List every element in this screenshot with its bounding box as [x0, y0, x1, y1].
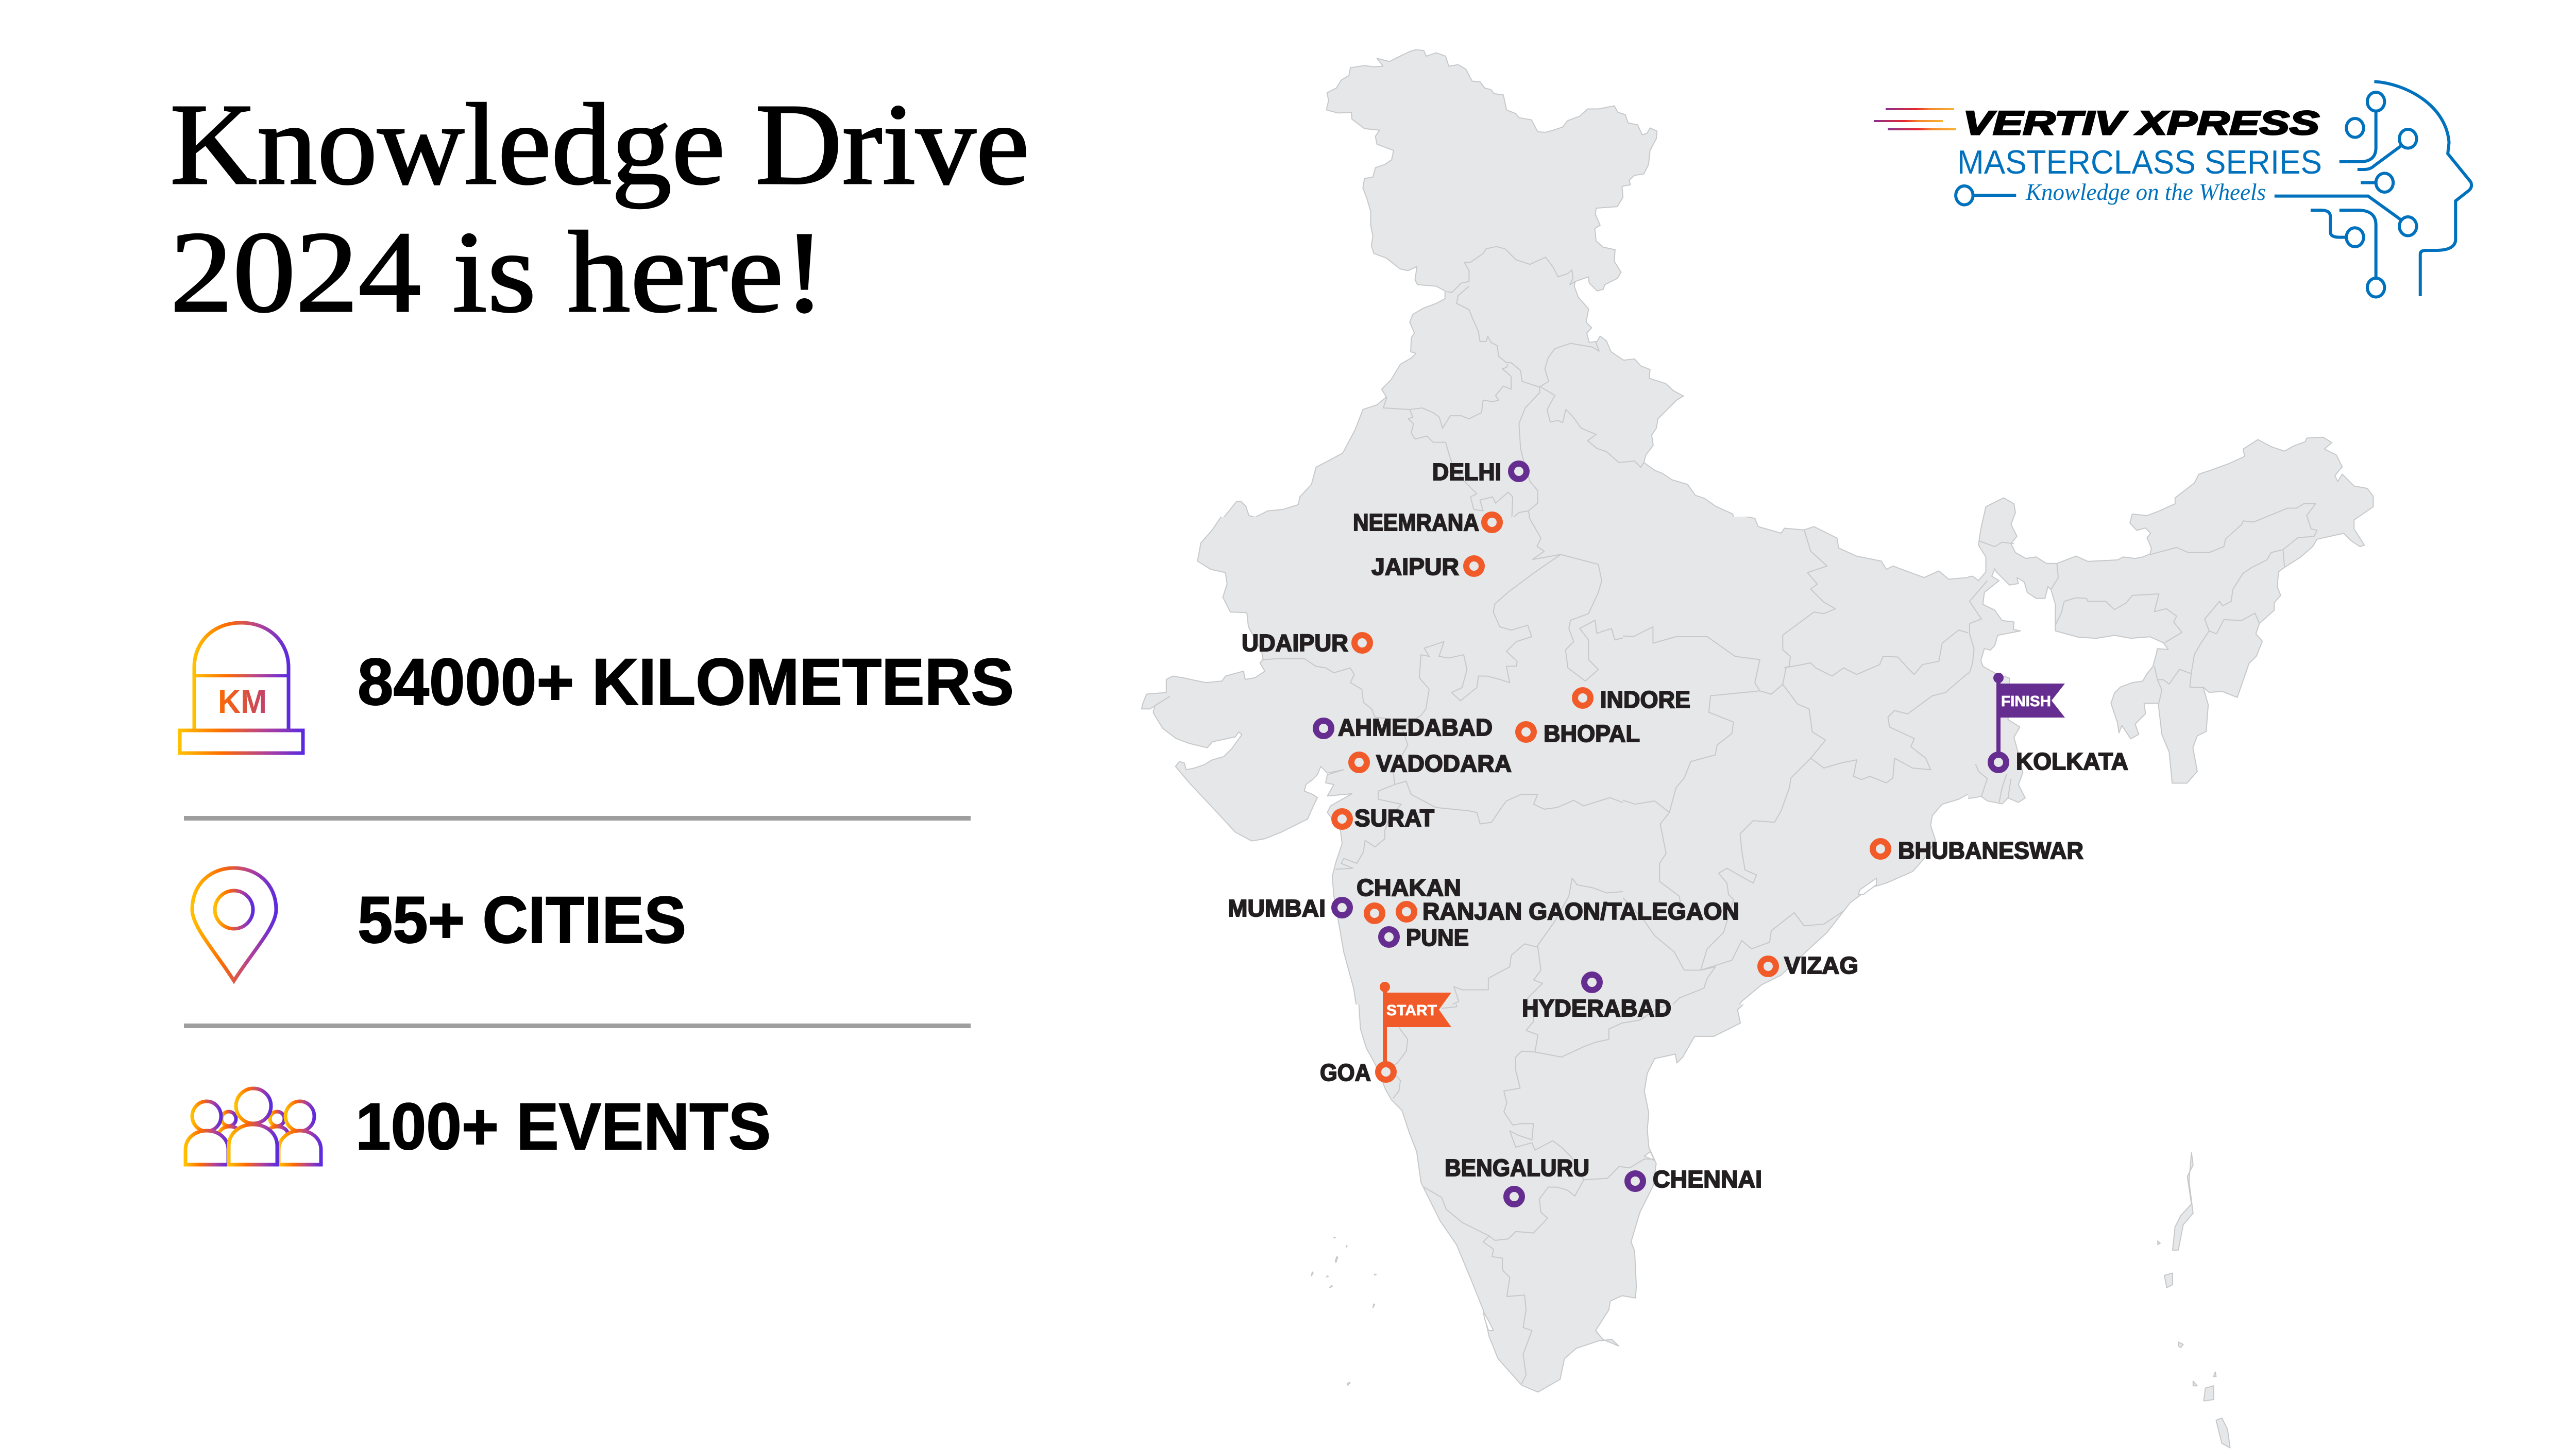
stat: kilometers: 84000+ KILOMETERS — [358, 645, 1014, 719]
flag: start at Goa: START — [1386, 1002, 1437, 1019]
flag: finish at Kolkata — [1993, 673, 2065, 762]
city: Ranjan Gaon/Talegaon: RANJAN GAON/TALEGAON — [1422, 898, 1739, 925]
logo tagline: Knowledge on the Wheels — [2025, 179, 2266, 205]
city: Indore: INDORE — [1600, 686, 1690, 713]
city: Chakan — [1357, 874, 1461, 921]
map region: north east and Bengal — [1958, 437, 2373, 804]
city: Bhubaneswar: BHUBANESWAR — [1898, 837, 2083, 864]
city: Hyderabad: HYDERABAD — [1522, 995, 1671, 1021]
city: Bengaluru — [1445, 1154, 1589, 1204]
title: 2024 is here! — [170, 208, 825, 336]
map region: east — [1623, 517, 1968, 1004]
city: Chennai: CHENNAI — [1653, 1166, 1762, 1192]
map of India — [1142, 49, 2373, 1448]
icon: location pin — [192, 868, 276, 981]
map: Lakshadweep islands — [1311, 1237, 1376, 1385]
flag: finish at Kolkata: FINISH — [2001, 693, 2051, 710]
city: Delhi: DELHI — [1432, 458, 1501, 485]
city: Bhopal: BHOPAL — [1544, 720, 1640, 747]
stat: cities: 55+ CITIES — [358, 883, 686, 957]
icon: kilometer milestone — [180, 623, 303, 753]
title — [170, 80, 1029, 336]
city: Neemrana: NEEMRANA — [1353, 509, 1479, 536]
city: Udaipur: UDAIPUR — [1242, 629, 1348, 656]
divider — [184, 1024, 971, 1028]
title: Knowledge Drive — [170, 80, 1029, 209]
logo subtitle: MASTERCLASS SERIES — [1957, 143, 2322, 181]
city: Vizag: VIZAG — [1784, 952, 1858, 979]
divider — [184, 816, 971, 821]
logo: Vertiv Xpress Masterclass Series — [1874, 81, 2471, 297]
city: Kolkata: KOLKATA — [2016, 748, 2128, 775]
city: Goa: GOA — [1320, 1059, 1371, 1086]
city: Pune — [1381, 924, 1469, 951]
logo speed lines — [1874, 108, 1956, 130]
city: Chakan: CHAKAN — [1357, 874, 1461, 901]
city: Bengaluru: BENGALURU — [1445, 1154, 1589, 1181]
city: Ahmedabad: AHMEDABAD — [1338, 714, 1493, 741]
stat: events: 100+ EVENTS — [355, 1090, 771, 1164]
logo wordmark: VERTIV XPRESS — [1963, 104, 2319, 142]
map region: north — [1218, 49, 1736, 531]
city: Vadodara: VADODARA — [1376, 750, 1512, 777]
flag: start at Goa — [1380, 982, 1451, 1072]
city: Surat: SURAT — [1354, 805, 1434, 831]
city: Pune: PUNE — [1406, 924, 1469, 951]
logo circuit head — [1956, 81, 2471, 297]
city: Mumbai: MUMBAI — [1228, 895, 1326, 922]
map region: west — [1141, 517, 1623, 1004]
city: Jaipur: JAIPUR — [1371, 553, 1459, 580]
city: Hyderabad — [1522, 975, 1671, 1021]
icon: kilometer milestone: KM — [218, 683, 267, 720]
map: Andaman and Nicobar islands — [2158, 1153, 2230, 1448]
icon: group of people — [185, 1088, 321, 1165]
map region: south — [1358, 1004, 1744, 1393]
